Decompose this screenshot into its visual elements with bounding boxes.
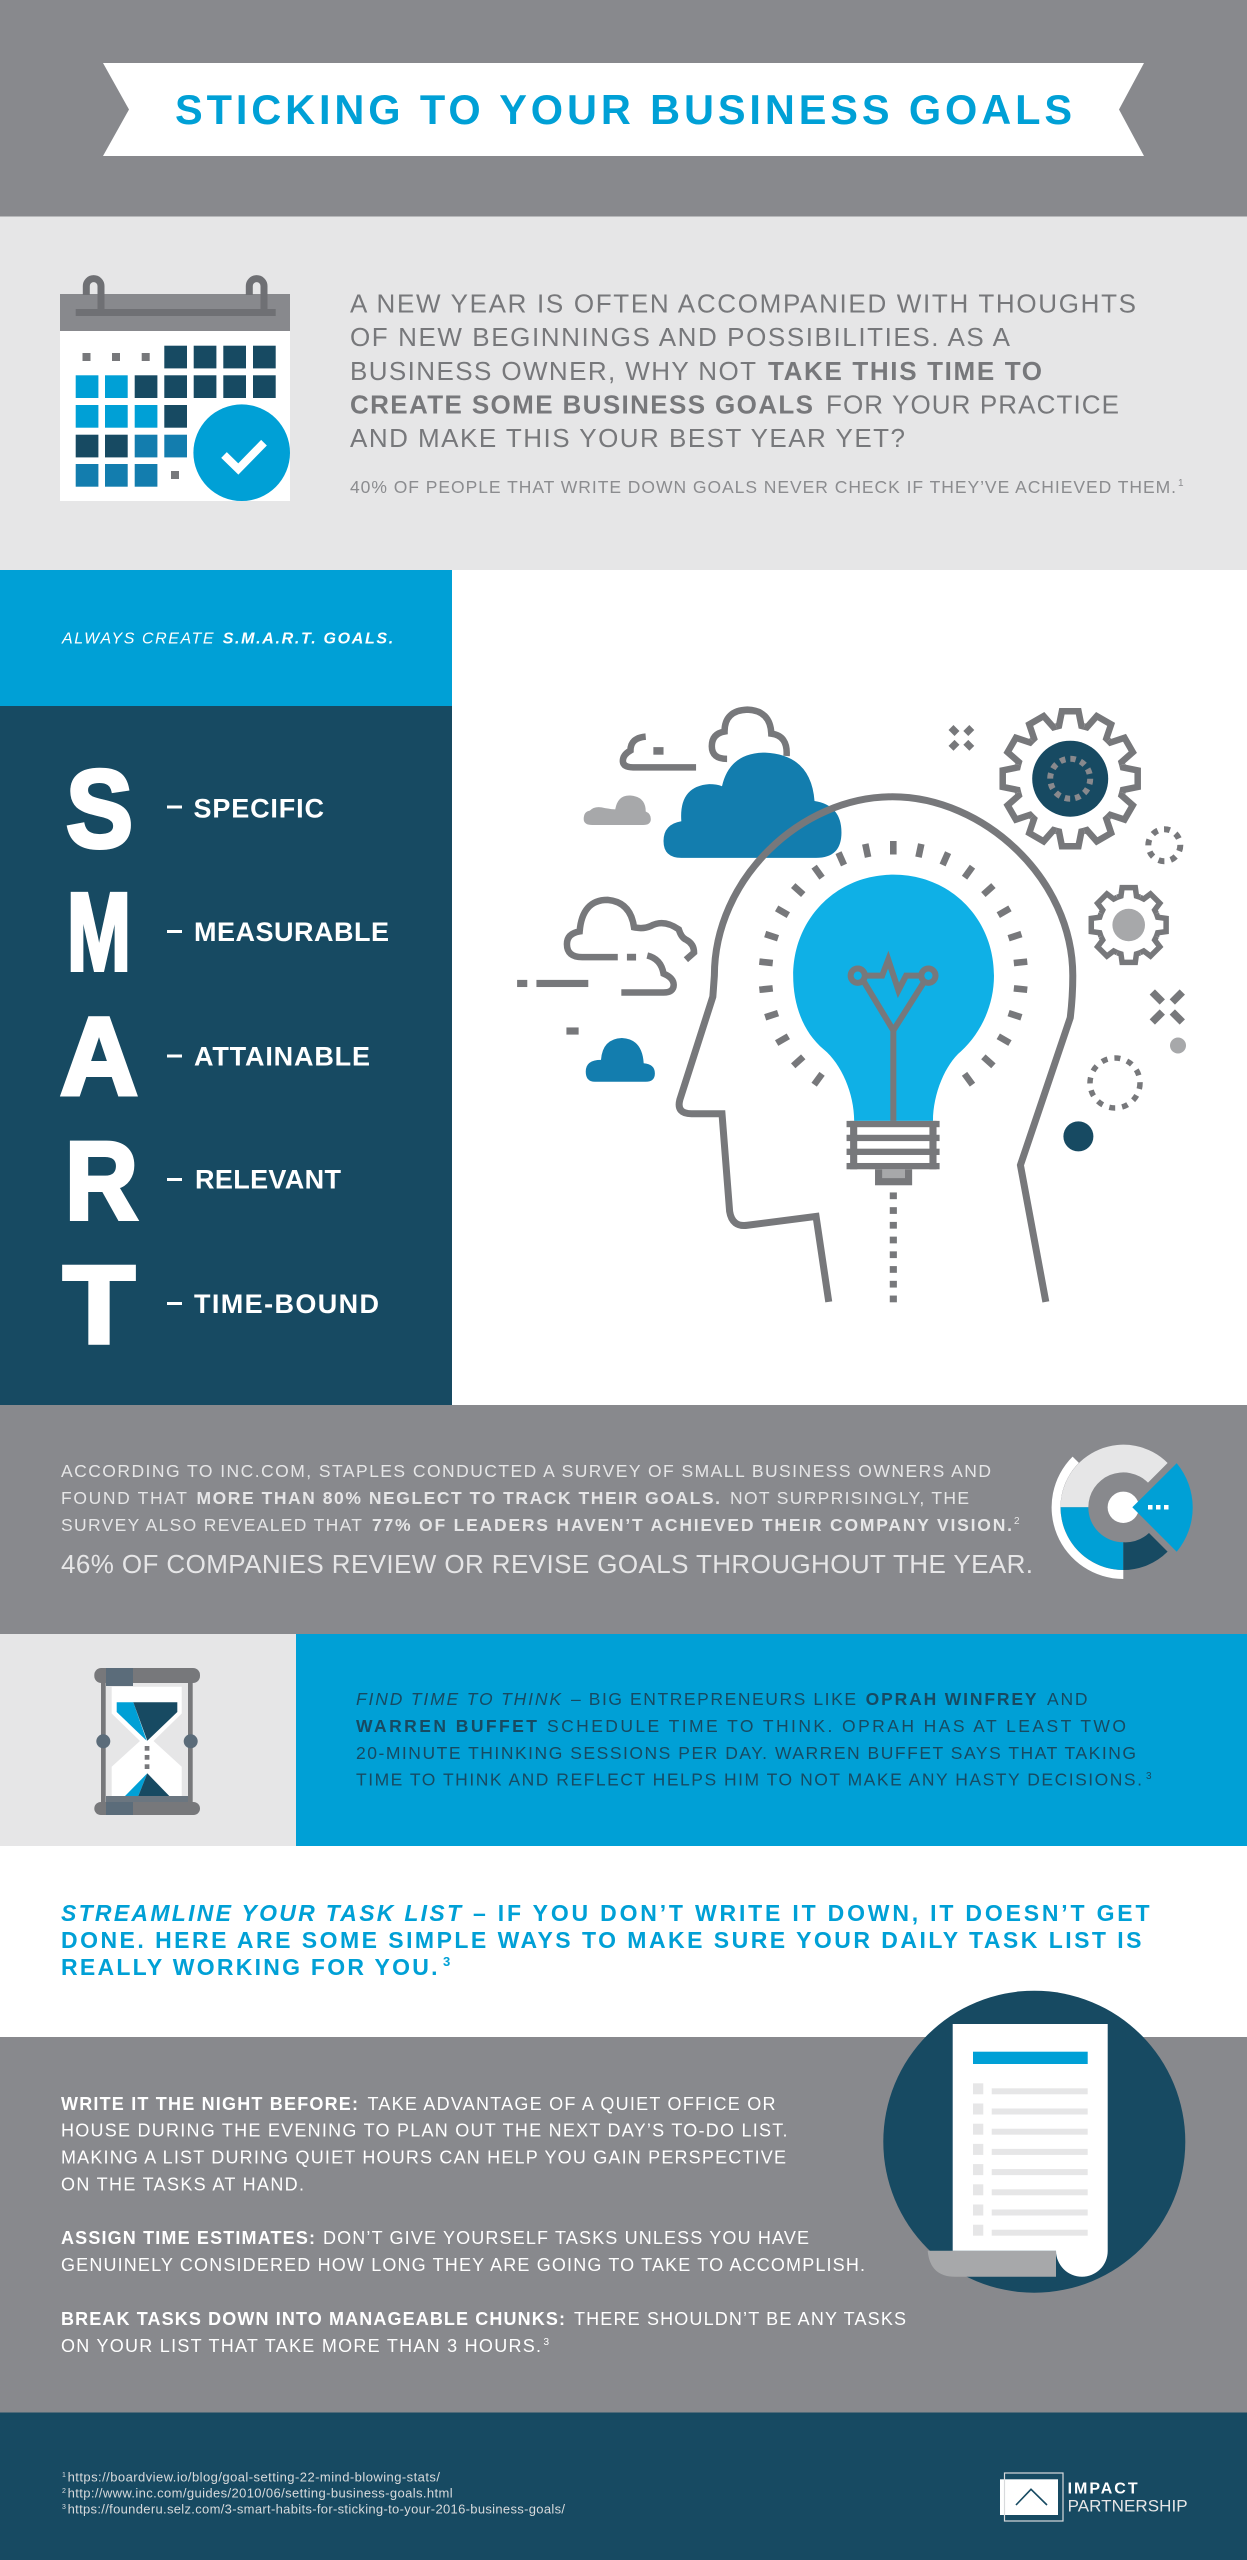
intro paragraph: CREATE SOME BUSINESS GOALS <box>350 390 813 420</box>
panel: footer <box>0 2412 1247 2560</box>
tip: assign time estimates: GENUINELY CONSIDERED HOW LONG THEY ARE GOING TO TAKE TO ACCOMPLISH. <box>61 2255 865 2275</box>
smart terms: ATTAINABLE <box>194 1042 370 1072</box>
icon: donut chart <box>1052 1445 1193 1579</box>
tip: assign time estimates: ASSIGN TIME ESTIMATES: <box>61 2228 315 2248</box>
tip: write it the night before <box>61 2094 788 2194</box>
smart letters <box>60 748 138 1367</box>
paragraph: find time to think: 20-MINUTE THINKING SESSIONS PER DAY. WARREN BUFFET SAYS THAT TAKING <box>356 1743 1136 1763</box>
logo: impact partnership <box>1000 2473 1188 2521</box>
tip: break tasks down: ON YOUR LIST THAT TAKE MORE THAN 3 HOURS. <box>61 2336 541 2356</box>
smart terms: MEASURABLE <box>194 917 389 947</box>
icon: dashed circles and dots <box>1063 829 1186 1151</box>
icon: medium gear <box>1091 888 1166 962</box>
streamline text: – IF YOU DON’T WRITE IT DOWN, IT DOESN’T GET <box>473 1900 1150 1926</box>
icon: large gear <box>1003 711 1138 846</box>
sources: 2 <box>62 2488 66 2495</box>
ribbon banner <box>103 63 1144 156</box>
title: STICKING TO YOUR BUSINESS GOALS <box>175 86 1072 133</box>
sources: http://www.inc.com/guides/2010/06/setting-business-goals.html <box>68 2486 453 2501</box>
smart letters: M <box>67 871 131 994</box>
intro paragraph: OF NEW BEGINNINGS AND POSSIBILITIES. AS A <box>350 322 1011 352</box>
tip: write it the night before: ON THE TASKS AT HAND. <box>61 2174 304 2194</box>
bulb rays <box>759 841 1028 1087</box>
sources <box>62 2470 565 2516</box>
icon: cross marks <box>951 728 1182 1022</box>
streamline text: REALLY WORKING FOR YOU. <box>61 1954 438 1980</box>
survey paragraph: MORE THAN 80% NEGLECT TO TRACK THEIR GOALS. <box>196 1488 720 1508</box>
survey paragraph: NOT SURPRISINGLY, THE <box>730 1488 969 1508</box>
statistic: 46 percent: 46% OF COMPANIES REVIEW OR REVISE GOALS THROUGHOUT THE YEAR. <box>61 1549 1033 1579</box>
tip: write it the night before: HOUSE DURING THE EVENING TO PLAN OUT THE NEXT DAY’S TO-DO LIST. <box>61 2121 788 2141</box>
sources: https://boardview.io/blog/goal-setting-22-mind-blowing-stats/ <box>68 2470 440 2485</box>
streamline text: 3 <box>443 1954 450 1969</box>
panel: task list tips <box>0 1991 1247 2412</box>
intro paragraph: BUSINESS OWNER, WHY NOT <box>350 356 756 386</box>
paragraph: find time to think: – BIG ENTREPRENEURS LIKE <box>571 1689 856 1709</box>
statistic: 40 percent: 1 <box>1178 478 1184 489</box>
smart heading text <box>61 630 393 648</box>
smart letters: S <box>66 748 133 871</box>
smart terms <box>167 794 389 1319</box>
panel: smart heading <box>0 570 452 706</box>
survey paragraph <box>61 1461 1020 1535</box>
tip: assign time estimates: DON’T GIVE YOURSELF TASKS UNLESS YOU HAVE <box>323 2228 809 2248</box>
tip: break tasks down: 3 <box>544 2337 550 2348</box>
tip: break tasks down: BREAK TASKS DOWN INTO MANAGEABLE CHUNKS: <box>61 2309 565 2329</box>
intro paragraph: A NEW YEAR IS OFTEN ACCOMPANIED WITH THOUGHTS <box>350 288 1136 318</box>
smart heading text: S.M.A.R.T. GOALS. <box>223 630 393 648</box>
paragraph: find time to think <box>356 1689 1152 1790</box>
panel: streamline intro <box>0 1846 1247 2037</box>
survey paragraph: 2 <box>1014 1516 1020 1527</box>
smart heading text: ALWAYS CREATE <box>61 630 214 648</box>
statistic: 40 percent: 40% OF PEOPLE THAT WRITE DOWN GOALS NEVER CHECK IF THEY’VE ACHIEVED THEM. <box>350 477 1176 497</box>
paragraph: find time to think: OPRAH WINFREY <box>866 1689 1037 1709</box>
smart terms: RELEVANT <box>195 1164 342 1194</box>
streamline text: DONE. HERE ARE SOME SIMPLE WAYS TO MAKE SURE YOUR DAILY TASK LIST IS <box>61 1927 1142 1953</box>
sources: 3 <box>62 2504 66 2511</box>
intro paragraph <box>350 288 1136 453</box>
icon: hourglass <box>94 1668 200 1815</box>
sources: 1 <box>62 2472 66 2479</box>
tip: write it the night before: MAKING A LIST DURING QUIET HOURS CAN HELP YOU GAIN PERSPECTIVE <box>61 2148 786 2168</box>
intro paragraph: AND MAKE THIS YOUR BEST YEAR YET? <box>350 423 905 453</box>
streamline text: STREAMLINE YOUR TASK LIST <box>61 1900 463 1926</box>
icon: checklist scroll <box>883 1991 1185 2293</box>
head outline <box>679 797 1073 1302</box>
paragraph: find time to think: SCHEDULE TIME TO THINK. OPRAH HAS AT LEAST TWO <box>547 1716 1126 1736</box>
intro paragraph: TAKE THIS TIME TO <box>768 356 1042 386</box>
tip: assign time estimates <box>61 2228 865 2275</box>
panel: hourglass <box>0 1634 1247 1846</box>
paragraph: find time to think: WARREN BUFFET <box>356 1716 537 1736</box>
paragraph: find time to think: AND <box>1047 1689 1088 1709</box>
survey paragraph: SURVEY ALSO REVEALED THAT <box>61 1515 362 1535</box>
tip: break tasks down: THERE SHOULDN’T BE ANY TASKS <box>574 2309 906 2329</box>
illustration: head with lightbulb <box>517 710 1186 1302</box>
tip: break tasks down <box>61 2309 906 2356</box>
intro paragraph: FOR YOUR PRACTICE <box>826 390 1119 420</box>
tip: write it the night before: TAKE ADVANTAGE OF A QUIET OFFICE OR <box>368 2094 776 2114</box>
smart terms: SPECIFIC <box>194 794 324 824</box>
paragraph: find time to think: 3 <box>1146 1771 1152 1782</box>
panel: header band <box>0 0 1247 216</box>
logo: impact partnership: IMPACT <box>1068 2480 1138 2497</box>
smart letters: R <box>65 1120 138 1243</box>
paragraph: find time to think: FIND TIME TO THINK <box>356 1689 562 1709</box>
sources: https://founderu.selz.com/3-smart-habits-for-sticking-to-your-2016-business-goals/ <box>68 2501 565 2516</box>
survey paragraph: ACCORDING TO INC.COM, STAPLES CONDUCTED A SURVEY OF SMALL BUSINESS OWNERS AND <box>61 1461 991 1481</box>
panel: intro <box>0 216 1247 570</box>
smart terms: TIME-BOUND <box>194 1289 379 1319</box>
survey paragraph: 77% OF LEADERS HAVEN’T ACHIEVED THEIR COMPANY VISION. <box>372 1515 1012 1535</box>
smart letters: A <box>60 996 138 1118</box>
clouds and marks, zoom-space coordinates <box>517 710 1073 1302</box>
lightbulb <box>793 875 994 1302</box>
smart letters: T <box>63 1244 135 1367</box>
icon: calendar <box>60 279 290 501</box>
tip: write it the night before: WRITE IT THE NIGHT BEFORE: <box>61 2094 358 2114</box>
logo: impact partnership: PARTNERSHIP <box>1068 2497 1188 2516</box>
panel: smart list <box>0 706 452 1405</box>
streamline text <box>61 1900 1150 1980</box>
survey paragraph: FOUND THAT <box>61 1488 187 1508</box>
paragraph: find time to think: TIME TO THINK AND REFLECT HELPS HIM TO NOT MAKE ANY HASTY DECISIONS. <box>356 1770 1142 1790</box>
panel: survey statistics <box>0 1405 1247 1634</box>
